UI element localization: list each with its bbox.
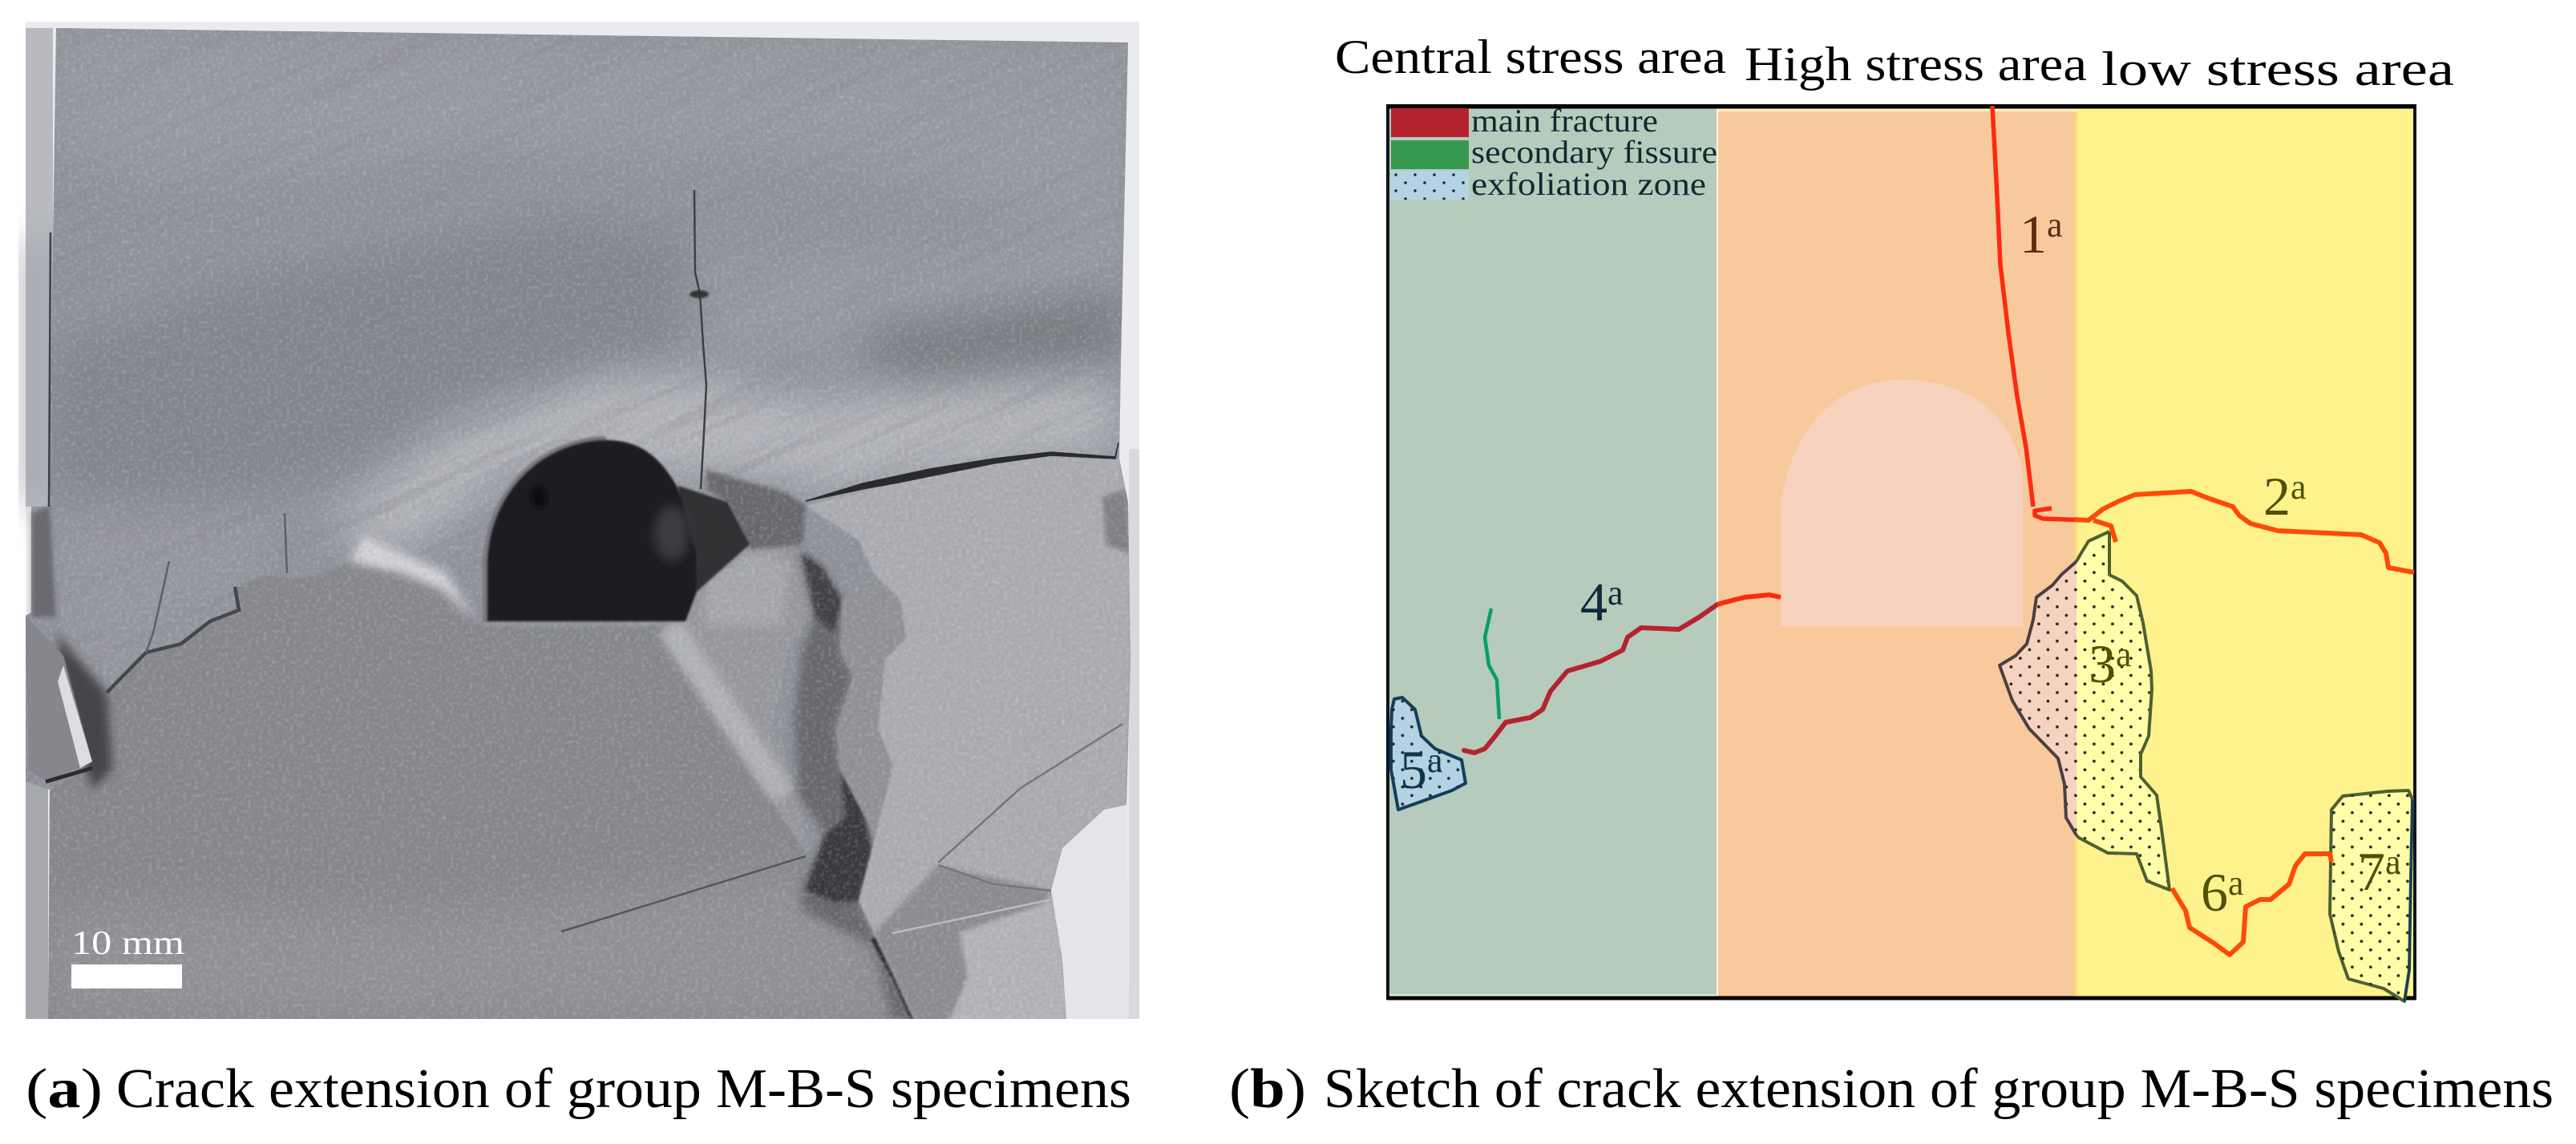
lower right dark facet bbox=[874, 865, 1051, 1023]
grain bbox=[24, 24, 1146, 1022]
crack 1: main fracture bbox=[1992, 106, 2089, 520]
label 4a: 4 bbox=[1580, 572, 1607, 633]
exfoliation zone 3 bbox=[1998, 530, 2171, 891]
legend: exfoliation zone bbox=[1391, 166, 1706, 202]
crack 4: segment in high stress zone bbox=[1717, 595, 1781, 604]
scale bar bbox=[71, 925, 184, 988]
caption a: (a) bbox=[26, 1058, 103, 1120]
tunnel opening bbox=[484, 439, 750, 625]
lower-left block bbox=[48, 561, 893, 1023]
grey strip beside fracture bbox=[835, 598, 871, 827]
caption a: Crack extension of group M-B-S specimens bbox=[116, 1058, 1131, 1120]
panel a: specimen photograph bbox=[18, 22, 1139, 1019]
rubble at tunnel corner bbox=[706, 470, 806, 549]
legend: main fracture bbox=[1391, 103, 1658, 139]
crack 2: main fracture bbox=[2074, 491, 2414, 572]
exfoliation zone 7 bbox=[2330, 790, 2412, 1001]
label 4a: a bbox=[1607, 573, 1624, 612]
secondary fissure bbox=[1485, 608, 1499, 719]
legend bbox=[1391, 103, 1717, 202]
panel b: crack sketch bbox=[1387, 103, 2416, 1001]
label 5a: 5 bbox=[1400, 739, 1427, 800]
zone heading: low stress area: low stress area bbox=[2101, 42, 2454, 95]
scale bar: 10 mm bbox=[71, 925, 184, 962]
label 7a: a bbox=[2385, 843, 2401, 882]
label 7a: 7 bbox=[2358, 841, 2385, 902]
label 6a: a bbox=[2228, 863, 2244, 903]
tunnel shape bbox=[1781, 380, 2023, 626]
crack 4: main fracture in central zone bbox=[1464, 604, 1717, 753]
zone: low stress bbox=[2077, 106, 2415, 997]
right block bbox=[806, 458, 1130, 1023]
label 5a: a bbox=[1427, 741, 1443, 780]
exfoliation zone 5 bbox=[1391, 697, 1466, 810]
caption b: Sketch of crack extension of group M-B-S specimens bbox=[1324, 1058, 2554, 1120]
label 3a: a bbox=[2116, 635, 2132, 674]
frame bbox=[1388, 106, 2415, 998]
bright exfoliated rim bbox=[350, 536, 475, 621]
specimen surface bbox=[26, 28, 1130, 1019]
zone: high stress bbox=[1717, 106, 2077, 997]
zone: central stress bbox=[1388, 106, 1717, 997]
zone heading: central stress area: Central stress area bbox=[1335, 30, 1726, 83]
crack 6: main fracture bbox=[2172, 854, 2331, 955]
central wedge bbox=[662, 567, 802, 827]
dark shadow of the main fracture bbox=[794, 549, 916, 1023]
label 2a: 2 bbox=[2263, 466, 2291, 527]
legend: exfoliation zone: exfoliation zone bbox=[1471, 166, 1706, 202]
legend: main fracture: main fracture bbox=[1471, 103, 1658, 139]
label 6a: 6 bbox=[2201, 862, 2228, 923]
label 3a: 3 bbox=[2089, 633, 2116, 694]
caption b: (b) bbox=[1229, 1058, 1306, 1120]
white exposed chunk bbox=[1051, 805, 1129, 1019]
label 2a: a bbox=[2291, 467, 2307, 507]
left broken chunk bbox=[26, 507, 112, 790]
label 1a: a bbox=[2047, 205, 2063, 245]
zone heading: high stress area: High stress area bbox=[1745, 38, 2087, 91]
legend: secondary fissure: secondary fissure bbox=[1471, 134, 1717, 170]
label 1a: 1 bbox=[2020, 204, 2047, 265]
legend: secondary fissure bbox=[1391, 134, 1717, 170]
cracks on the photo bbox=[694, 190, 706, 489]
